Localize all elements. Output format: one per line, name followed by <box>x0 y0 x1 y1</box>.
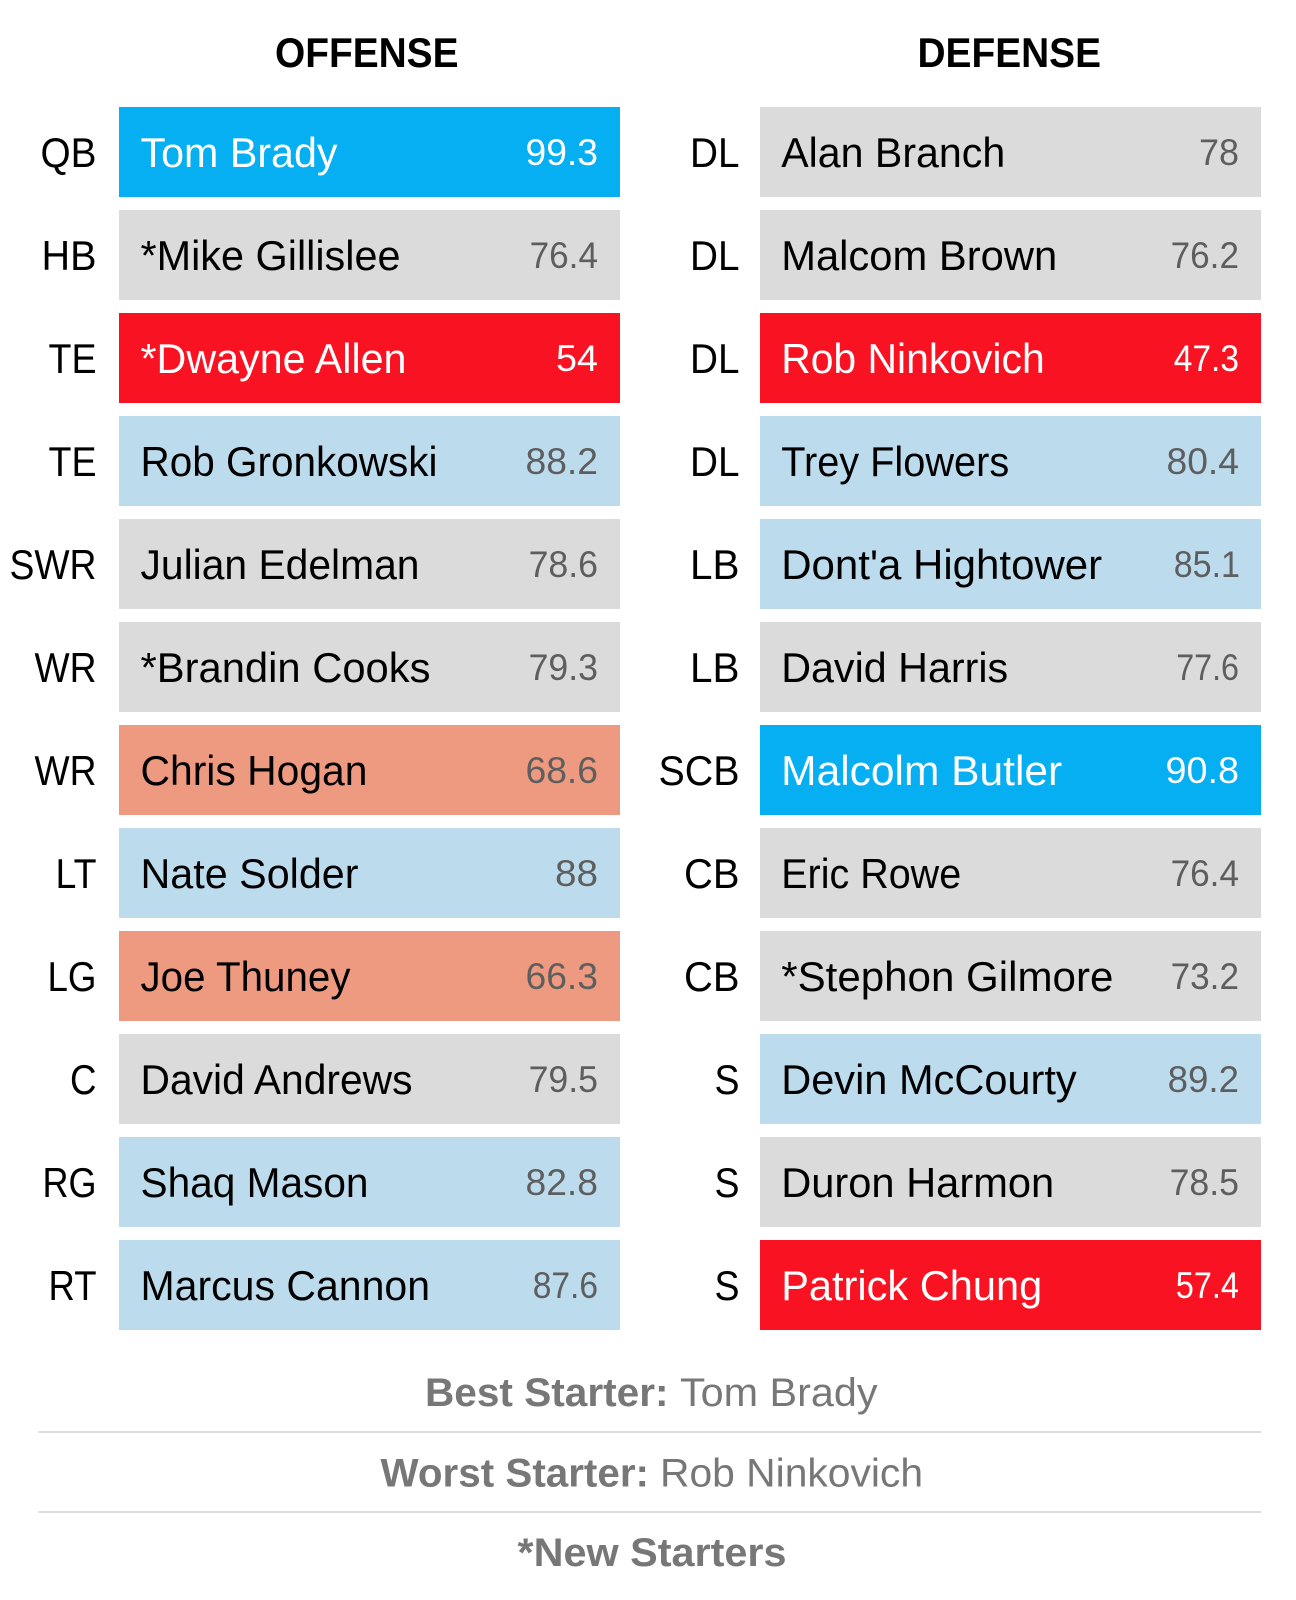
row: QB Tom Brady: 99.3 <box>526 132 598 173</box>
row: WR Brandin Cooks <box>34 622 620 712</box>
row: DL Alan Branch: 78 <box>1199 132 1239 173</box>
row: TE Rob Gronkowski: 88.2 <box>526 441 598 482</box>
row: RT Marcus Cannon: RT <box>48 1262 96 1309</box>
row: LB David Harris: LB <box>690 644 740 691</box>
text: new starters note: *New Starters <box>518 1531 786 1575</box>
row: C David Andrews: David Andrews <box>140 1056 412 1103</box>
row: QB Tom Brady <box>40 107 620 197</box>
panel: offense <box>10 29 620 1330</box>
row: TE Rob Gronkowski: Rob Gronkowski <box>140 438 438 485</box>
row: TE Dwayne Allen <box>48 313 620 403</box>
row: DL Rob Ninkovich: DL <box>690 335 740 382</box>
row: TE Dwayne Allen: *Dwayne Allen <box>140 335 406 382</box>
row: S Patrick Chung: S <box>714 1262 740 1309</box>
row: LG Joe Thuney: 66.3 <box>526 956 598 997</box>
row: LB Dont'a Hightower: LB <box>690 541 740 588</box>
row: CB Eric Rowe: CB <box>684 850 740 897</box>
row: LG Joe Thuney: LG <box>48 953 96 1000</box>
row: S Duron Harmon <box>714 1137 1261 1227</box>
row: WR Brandin Cooks: 79.3 <box>529 647 598 688</box>
row: RT Marcus Cannon: 87.6 <box>533 1265 598 1306</box>
row: SWR Julian Edelman <box>10 519 620 609</box>
row: S Devin McCourty: 89.2 <box>1168 1059 1239 1100</box>
row: DL Trey Flowers <box>690 416 1261 506</box>
row: S Duron Harmon: Duron Harmon <box>781 1159 1054 1206</box>
row: RG Shaq Mason: RG <box>42 1159 96 1206</box>
row: S Devin McCourty: Devin McCourty <box>781 1056 1077 1103</box>
row: CB Stephon Gilmore: *Stephon Gilmore <box>781 953 1113 1000</box>
row: S Patrick Chung: 57.4 <box>1176 1265 1239 1306</box>
row: DL Trey Flowers: DL <box>690 438 740 485</box>
row: SWR Julian Edelman: SWR <box>10 541 96 588</box>
row: HB Mike Gillislee <box>42 210 620 300</box>
row: WR Chris Hogan <box>34 725 620 815</box>
row: DL Rob Ninkovich: 47.3 <box>1174 338 1239 379</box>
row: LB Dont'a Hightower: Dont'a Hightower <box>781 541 1102 588</box>
row: RG Shaq Mason: Shaq Mason <box>140 1159 368 1206</box>
row: DL Rob Ninkovich: Rob Ninkovich <box>781 335 1045 382</box>
row: TE Dwayne Allen: TE <box>48 335 96 382</box>
row: S Patrick Chung: Patrick Chung <box>781 1262 1042 1309</box>
row: LT Nate Solder <box>56 828 620 918</box>
row: DL Trey Flowers: Trey Flowers <box>781 438 1009 485</box>
row: LT Nate Solder: LT <box>56 850 96 897</box>
row: SCB Malcolm Butler: Malcolm Butler <box>781 747 1062 794</box>
row: C David Andrews <box>70 1034 620 1124</box>
row: LB Dont'a Hightower <box>690 519 1261 609</box>
row: DL Alan Branch: DL <box>690 129 740 176</box>
row: HB Mike Gillislee: 76.4 <box>530 235 598 276</box>
text: best starter: Best Starter: <box>425 1371 668 1415</box>
row: QB Tom Brady: Tom Brady <box>140 129 338 176</box>
row: DL Alan Branch <box>690 107 1261 197</box>
row: DL Malcom Brown <box>690 210 1261 300</box>
row: TE Rob Gronkowski <box>48 416 620 506</box>
row: RG Shaq Mason <box>42 1137 620 1227</box>
text: best starter <box>425 1371 878 1415</box>
row: LG Joe Thuney <box>48 931 620 1021</box>
row: HB Mike Gillislee: *Mike Gillislee <box>140 232 400 279</box>
row: C David Andrews: C <box>70 1056 96 1103</box>
row: CB Stephon Gilmore: CB <box>684 953 740 1000</box>
row: WR Chris Hogan: 68.6 <box>526 750 598 791</box>
row: S Devin McCourty <box>714 1034 1261 1124</box>
row: LB David Harris: 77.6 <box>1176 647 1239 688</box>
row: WR Chris Hogan: Chris Hogan <box>140 747 368 794</box>
row: S Devin McCourty: S <box>714 1056 740 1103</box>
row: WR Brandin Cooks: *Brandin Cooks <box>140 644 430 691</box>
row: TE Rob Gronkowski: TE <box>48 438 96 485</box>
row: SCB Malcolm Butler <box>658 725 1261 815</box>
row: LG Joe Thuney: Joe Thuney <box>140 953 350 1000</box>
row: CB Eric Rowe <box>684 828 1261 918</box>
text: worst starter: Rob Ninkovich <box>660 1452 923 1496</box>
row: LB Dont'a Hightower: 85.1 <box>1174 544 1240 585</box>
row: SWR Julian Edelman: Julian Edelman <box>140 541 420 588</box>
row: DL Malcom Brown: Malcom Brown <box>781 232 1057 279</box>
row: LT Nate Solder: 88 <box>555 853 598 894</box>
row: CB Stephon Gilmore: 73.2 <box>1171 956 1239 997</box>
row: CB Eric Rowe: 76.4 <box>1171 853 1239 894</box>
row: DL Rob Ninkovich <box>690 313 1261 403</box>
row: SCB Malcolm Butler: SCB <box>658 747 740 794</box>
row: RG Shaq Mason: 82.8 <box>526 1162 598 1203</box>
row: CB Stephon Gilmore <box>684 931 1261 1021</box>
row: RT Marcus Cannon <box>48 1240 620 1330</box>
text: worst starter: Worst Starter: <box>380 1452 649 1496</box>
row: HB Mike Gillislee: HB <box>42 232 96 279</box>
row: C David Andrews: 79.5 <box>529 1059 598 1100</box>
text: worst starter <box>380 1452 923 1496</box>
row: DL Malcom Brown: DL <box>690 232 740 279</box>
row: LB David Harris: David Harris <box>781 644 1008 691</box>
row: DL Trey Flowers: 80.4 <box>1166 441 1239 482</box>
row: RT Marcus Cannon: Marcus Cannon <box>140 1262 430 1309</box>
row: SCB Malcolm Butler: 90.8 <box>1166 750 1239 791</box>
row: WR Chris Hogan: WR <box>34 747 96 794</box>
heading: offense: OFFENSE <box>275 29 458 76</box>
row: CB Eric Rowe: Eric Rowe <box>781 850 961 897</box>
row: DL Alan Branch: Alan Branch <box>781 129 1005 176</box>
row: TE Dwayne Allen: 54 <box>556 338 598 379</box>
heading: defense: DEFENSE <box>918 29 1101 76</box>
footer notes <box>38 1371 1261 1575</box>
row: S Duron Harmon: S <box>714 1159 740 1206</box>
row: DL Malcom Brown: 76.2 <box>1171 235 1239 276</box>
row: SWR Julian Edelman: 78.6 <box>529 544 598 585</box>
row: QB Tom Brady: QB <box>40 129 96 176</box>
row: S Patrick Chung <box>714 1240 1261 1330</box>
row: WR Brandin Cooks: WR <box>34 644 96 691</box>
panel: defense <box>658 29 1261 1330</box>
text: best starter: Tom Brady <box>680 1371 878 1415</box>
row: LT Nate Solder: Nate Solder <box>140 850 359 897</box>
row: LB David Harris <box>690 622 1261 712</box>
row: S Duron Harmon: 78.5 <box>1170 1162 1239 1203</box>
